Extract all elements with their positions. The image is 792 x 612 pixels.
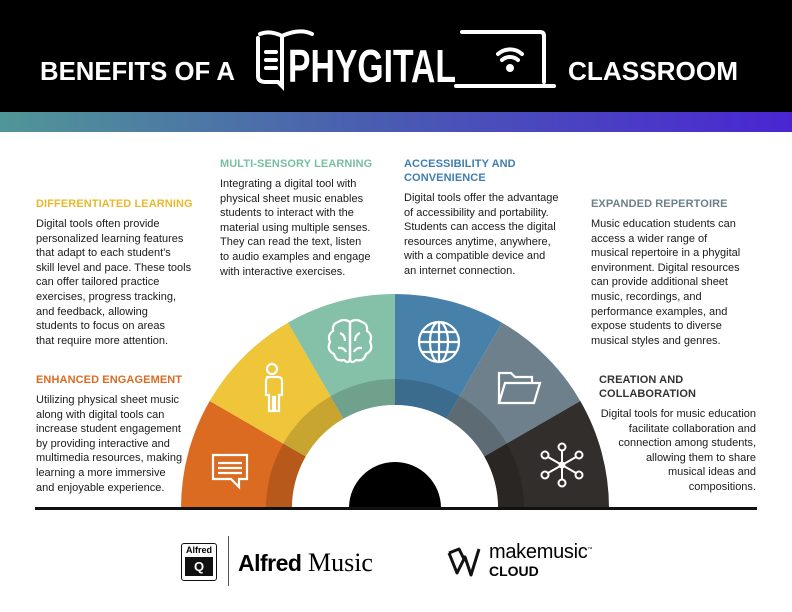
logo: alfred music: Alfred [186, 545, 212, 555]
icon: globe [419, 322, 459, 362]
text: creation and collaboration [599, 374, 756, 493]
icon: chat [213, 455, 247, 487]
title: PHYGITAL [288, 40, 456, 92]
text: expanded repertoire: EXPANDED REPERTOIRE [591, 198, 728, 210]
text: creation and collaboration: allowing them to share [646, 452, 756, 464]
text: enhanced engagement: multimedia resources, making [36, 452, 182, 464]
text: enhanced engagement: Utilizing physical sheet music [36, 394, 179, 406]
icon: network [542, 444, 582, 486]
title: BENEFITS OF A [40, 56, 235, 86]
logo: makemusic cloud [448, 541, 592, 579]
text: expanded repertoire: musical styles and genres. [591, 335, 721, 347]
text: enhanced engagement: by providing interactive and [36, 438, 170, 450]
text: differentiated learning: skill level and pace. These tools [36, 262, 191, 274]
text: multi-sensory learning: MULTI-SENSORY LEARNING [220, 158, 372, 170]
text: multi-sensory learning: They can read the text, listen [220, 236, 361, 248]
text: multi-sensory learning: material using multiple senses. [220, 222, 370, 234]
text: enhanced engagement: and enjoyable experience. [36, 482, 164, 494]
text: accessibility: with a compatible device and [404, 250, 545, 262]
text: accessibility: resources anytime, anywhere, [404, 236, 551, 248]
icon: laptop wifi [456, 32, 554, 86]
text: enhanced engagement: learning a more immersive [36, 467, 166, 479]
text: expanded repertoire: expose students to diverse [591, 320, 722, 332]
text: creation and collaboration: COLLABORATION [599, 388, 696, 400]
text: differentiated learning: DIFFERENTIATED LEARNING [36, 198, 193, 210]
logo: alfred music [181, 536, 373, 586]
text: creation and collaboration: facilitate collaboration and [629, 423, 756, 435]
text: accessibility: ACCESSIBILITY AND [404, 158, 516, 170]
icon: person [266, 364, 282, 411]
text: creation and collaboration: compositions. [689, 481, 756, 493]
text: expanded repertoire: can provide additional sheet [591, 276, 728, 288]
text: differentiated learning: can offer tailored practice [36, 276, 159, 288]
text: multi-sensory learning: students to interact with the [220, 207, 354, 219]
logo: makemusic cloud: makemusic™ [489, 541, 592, 563]
text: accessibility [404, 158, 559, 277]
text: creation and collaboration: musical ideas and [668, 466, 756, 478]
text: accessibility: an internet connection. [404, 265, 515, 277]
text: differentiated learning: that adapt to each student's [36, 247, 171, 259]
title: CLASSROOM [568, 56, 738, 86]
logo: makemusic cloud: CLOUD [489, 563, 539, 579]
text: multi-sensory learning: with interactive exercises. [220, 266, 345, 278]
title [40, 29, 738, 92]
icon: book [258, 31, 312, 86]
icon: folder [499, 373, 540, 403]
text: expanded repertoire: environment. Digital resources [591, 262, 740, 274]
text: expanded repertoire: Music education students can [591, 218, 736, 230]
text: multi-sensory learning [220, 158, 372, 278]
text: creation and collaboration: CREATION AND [599, 374, 683, 386]
text: differentiated learning: students to focus on areas [36, 320, 165, 332]
text: enhanced engagement: ENHANCED ENGAGEMENT [36, 374, 182, 386]
text: enhanced engagement: along with digital tools can [36, 409, 164, 421]
text: accessibility: Students can access the digital [404, 221, 556, 233]
text: enhanced engagement: increase student engagement [36, 423, 181, 435]
text: expanded repertoire: musical repertoire in a phygital [591, 247, 740, 259]
text: differentiated learning [36, 198, 193, 347]
logo: alfred music: Q [194, 559, 204, 574]
header [0, 0, 792, 112]
text: differentiated learning: Digital tools often provide [36, 218, 160, 230]
text: accessibility: Digital tools offer the advantage [404, 192, 559, 204]
baseline [35, 507, 757, 510]
text: expanded repertoire: performance examples, and [591, 306, 727, 318]
text: multi-sensory learning: physical sheet music enables [220, 193, 363, 205]
text: expanded repertoire: music, recordings, and [591, 291, 702, 303]
text: multi-sensory learning: to audio examples and engage [220, 251, 370, 263]
text: enhanced engagement [36, 374, 182, 494]
gradient bar [0, 112, 792, 132]
text: expanded repertoire: access a wider range of [591, 233, 707, 245]
text: differentiated learning: and feedback, allowing [36, 306, 148, 318]
text: creation and collaboration: Digital tools for music education [601, 408, 756, 420]
logo: alfred music: Alfred Music [238, 548, 373, 577]
text: expanded repertoire [591, 198, 740, 347]
text: creation and collaboration: connection among students, [618, 437, 756, 449]
text: differentiated learning: exercises, progress tracking, [36, 291, 176, 303]
text: differentiated learning: that require more attention. [36, 335, 168, 347]
text: differentiated learning: personalized learning features [36, 233, 183, 245]
icon: brain [329, 320, 371, 362]
text: accessibility: CONVENIENCE [404, 172, 486, 184]
text: multi-sensory learning: Integrating a digital tool with [220, 178, 356, 190]
text: accessibility: of accessibility and portability. [404, 207, 549, 219]
